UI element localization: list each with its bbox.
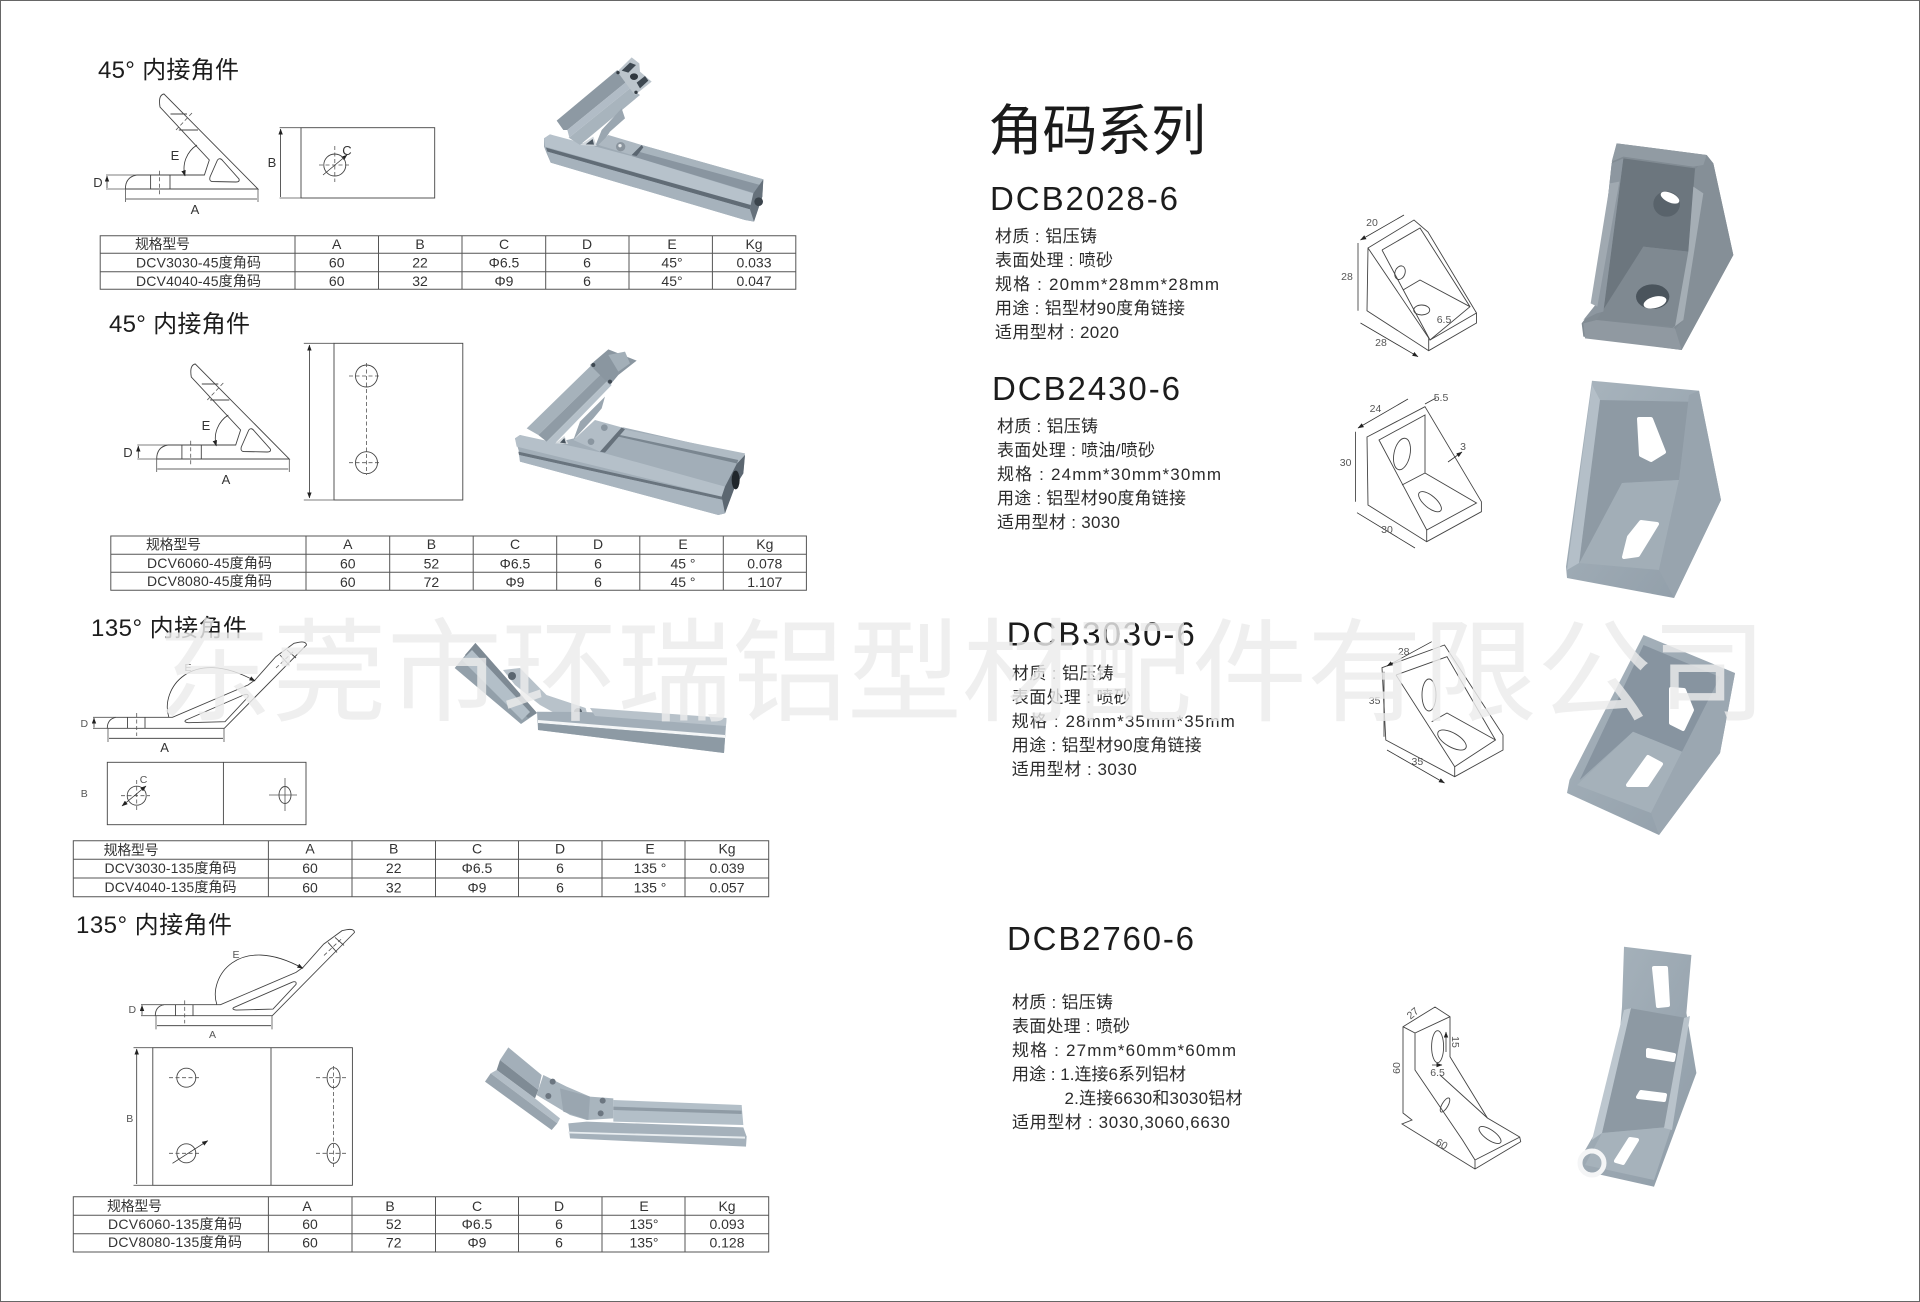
plate drawing with four holes [126,1048,352,1185]
specification list: 用途 : 铝型材90度角链接 [1012,736,1202,755]
table: 135 degree large sizes: D [554,1198,564,1214]
specification list: 规格 : 27mm*60mm*60mm [1012,1041,1236,1060]
table: 135 degree small sizes: C [472,840,482,856]
model name: DCB2760-6 [1007,920,1194,957]
table: 45 degree small sizes: 32 [412,273,428,289]
specification list: 规格 : 20mm*28mm*28mm [995,275,1219,294]
table: 135 degree small sizes: E [645,840,655,856]
table: 45 degree large sizes: B [427,536,436,552]
table: 45 degree large sizes: 60 [340,574,356,590]
table: 135 degree small sizes: 0.057 [709,880,745,896]
specification list: 适用型材 : 3030,3060,6630 [1012,1113,1230,1132]
panel: 45 degree corner small [93,57,796,289]
table: 135 degree large sizes: Φ6.5 [462,1216,493,1232]
table: 45 degree large sizes: 规格型号 [146,536,201,552]
table: 135 degree small sizes: 60 [302,880,318,896]
heading: 135 degree inner corner: 135° 内接角件 [76,912,232,939]
table: 135 degree large sizes: E [639,1198,649,1214]
table: 135 degree large sizes [73,1197,769,1252]
table: 135 degree large sizes: 72 [386,1234,402,1250]
table: 135 degree large sizes: 6 [555,1234,563,1250]
table: 45 degree large sizes: 60 [340,556,356,572]
table: 135 degree small sizes: 135 ° [634,860,666,876]
plate drawing with two holes [304,343,463,500]
table: 45 degree large sizes: Kg [756,536,773,552]
heading: 45 degree inner corner: 45° 内接角件 [109,311,250,338]
table: 45 degree small sizes: D [582,236,592,252]
side drawing with dimensions: A [209,1029,216,1041]
isometric drawing: 20 [1366,217,1378,229]
table: 135 degree small sizes: 6 [556,860,564,876]
side drawing with dimensions: D [81,718,89,730]
heading: 135 degree inner corner: 135° 内接角件 [91,615,247,642]
table: 45 degree small sizes: A [332,236,342,252]
side drawing with dimensions [129,929,354,1041]
table: 45 degree small sizes: E [667,236,677,252]
side drawing with dimensions: E [171,148,180,163]
table: 45 degree small sizes: Φ6.5 [489,254,520,270]
table: 45 degree large sizes: 45 ° [670,574,696,590]
table: 45 degree small sizes: 6 [583,273,591,289]
side drawing with dimensions: E [184,662,192,674]
table: 45 degree large sizes: 6 [594,574,602,590]
plate drawing with hole [268,128,435,198]
specification list: 规格 : 28mm*35mm*35mm [1012,712,1235,731]
specification list: 表面处理 : 喷砂 [1012,688,1131,707]
table: 135 degree large sizes: 0.128 [709,1234,745,1250]
plate drawing with hole and slot: B [81,788,88,800]
table: 135 degree large sizes: C [472,1198,482,1214]
photo: bracket [1582,143,1733,350]
table: 135 degree large sizes: DCV6060-135度角码 [108,1216,242,1232]
table: 135 degree small sizes: 规格型号 [104,842,159,858]
panel: DCB2028-6 [990,143,1733,357]
specification list: 用途 : 铝型材90度角链接 [997,489,1186,508]
specification list: 表面处理 : 喷砂 [995,251,1113,270]
table: 45 degree large sizes: Φ6.5 [500,556,531,572]
photo: 135 degree assembled profile [455,643,726,753]
isometric drawing: 27 [1405,1005,1422,1022]
table: 45 degree large sizes: A [343,536,353,552]
table: 45 degree small sizes: 规格型号 [135,236,190,252]
table: 45 degree large sizes: DCV6060-45度角码 [147,555,272,571]
photo: 45 degree assembled profile [544,57,763,222]
photo: bracket [1567,635,1735,835]
isometric drawing: 35 [1369,695,1381,707]
specification list [1012,664,1235,779]
side drawing with dimensions: D [123,445,133,460]
table: 135 degree small sizes [73,840,769,897]
table: 45 degree large sizes: DCV8080-45度角码 [147,573,272,589]
table: 135 degree large sizes: DCV8080-135度角码 [108,1234,242,1250]
isometric drawing [1391,1005,1521,1169]
table: 135 degree small sizes: DCV3030-135度角码 [104,860,236,876]
isometric drawing: 28 [1375,337,1387,349]
model name: DCB2430-6 [992,370,1180,407]
table: 45 degree small sizes: 6 [583,254,591,270]
side drawing with dimensions: E [202,418,211,433]
table: 135 degree small sizes: DCV4040-135度角码 [104,879,236,895]
side drawing with dimensions: D [129,1004,137,1016]
panel: DCB3030-6 [1007,616,1735,835]
table: 45 degree large sizes: 52 [424,556,439,572]
isometric drawing: 30 [1381,524,1393,536]
panel: DCB2430-6 [992,370,1721,598]
side drawing with dimensions [123,364,289,487]
table: 45 degree large sizes: 1.107 [747,574,783,590]
plate drawing with hole and slot [81,762,306,825]
specification list: 用途 : 铝型材90度角链接 [995,299,1185,318]
heading: 45 degree inner corner: 45° 内接角件 [98,57,239,84]
table: 135 degree small sizes: D [555,840,565,856]
table: 135 degree large sizes: 6 [555,1216,563,1232]
table: 45 degree large sizes: E [678,536,688,552]
side drawing with dimensions: E [232,949,240,961]
table: 135 degree large sizes: 135° [630,1234,658,1250]
table: 135 degree large sizes: Kg [718,1198,736,1214]
specification list: 适用型材 : 2020 [995,323,1119,342]
isometric drawing [1369,642,1503,783]
panel: 135 degree corner small [73,615,769,897]
table: 45 degree large sizes: 45 ° [670,556,696,572]
photo: bracket [1579,947,1696,1187]
table: 135 degree large sizes: 60 [302,1216,318,1232]
isometric drawing: 15 [1449,1036,1461,1048]
side drawing with dimensions: D [93,175,103,190]
isometric drawing: 3 [1460,441,1466,453]
table: 135 degree large sizes: Φ9 [468,1234,487,1250]
table: 45 degree small sizes: DCV4040-45度角码 [136,273,261,289]
specification list [997,417,1221,532]
specification list: 材质 : 铝压铸 [995,227,1097,246]
specification list: 表面处理 : 喷砂 [1012,1017,1130,1036]
table: 45 degree small sizes: 0.047 [736,273,772,289]
table: 45 degree small sizes: 45° [661,254,683,270]
table: 135 degree small sizes: 32 [386,880,402,896]
side drawing with dimensions: A [160,740,169,755]
table: 135 degree small sizes: Φ9 [468,880,487,896]
isometric drawing: 60 [1433,1136,1450,1153]
table: 45 degree small sizes: 60 [329,254,345,270]
specification list: 规格 : 24mm*30mm*30mm [997,465,1221,484]
specification list: 2.连接6630和3030铝材 [1064,1089,1242,1108]
photo: 135 degree assembled wide profile [485,1047,747,1147]
main title: corner bracket series: 角码系列 [988,100,1206,162]
table: 45 degree large sizes: 0.078 [747,556,783,572]
watermark: company name: 东莞市环瑞铝型材配件有限公司 [157,611,1767,736]
table: 135 degree small sizes: A [305,840,315,856]
panel: 135 degree corner large [73,912,769,1252]
table: 45 degree large sizes: C [510,536,520,552]
model name: DCB3030-6 [1007,616,1195,653]
side drawing with dimensions: A [191,202,200,217]
plate drawing with hole and slot: C [140,774,148,786]
specification list: 适用型材 : 3030 [1012,760,1137,779]
table: 45 degree small sizes: 22 [412,254,428,270]
table: 135 degree large sizes: B [385,1198,395,1214]
isometric drawing: 6.5 [1430,1067,1445,1079]
specification list: 适用型材 : 3030 [997,513,1120,532]
side drawing with dimensions [81,642,306,755]
table: 45 degree large sizes: 6 [594,556,602,572]
table: 45 degree large sizes [111,536,806,590]
isometric drawing: 6.5 [1437,314,1451,326]
table: 135 degree large sizes: 60 [302,1234,318,1250]
table: 135 degree small sizes: Φ6.5 [462,860,493,876]
model name: DCB2028-6 [990,180,1178,217]
table: 135 degree small sizes: 6 [556,880,564,896]
table: 135 degree large sizes: 0.093 [709,1216,745,1232]
plate drawing with hole: B [268,155,276,170]
isometric drawing: 5.5 [1434,392,1448,404]
table: 135 degree large sizes: 规格型号 [107,1198,162,1214]
isometric drawing [1341,215,1476,357]
isometric drawing: 24 [1370,403,1381,415]
side drawing with dimensions: A [222,472,231,487]
table: 135 degree large sizes: 52 [386,1216,402,1232]
table: 45 degree small sizes: Φ9 [495,273,514,289]
isometric drawing: 28 [1398,646,1410,658]
specification list: 用途 : 1.连接6系列铝材 [1012,1065,1186,1084]
table: 45 degree large sizes: 72 [424,574,439,590]
table: 45 degree small sizes: 45° [661,273,683,289]
table: 135 degree small sizes: 0.039 [709,860,745,876]
isometric drawing [1340,392,1481,548]
table: 135 degree small sizes: 135 ° [634,880,666,896]
table: 45 degree small sizes: DCV3030-45度角码 [136,254,261,270]
isometric drawing: 30 [1340,457,1352,469]
table: 45 degree small sizes [100,236,796,289]
specification list [995,227,1219,342]
specification list: 材质 : 铝压铸 [1012,664,1114,683]
table: 45 degree large sizes: D [593,536,603,552]
photo: 45 degree assembled wide profile [515,349,745,515]
table: 135 degree large sizes: 135° [630,1216,658,1232]
side drawing with dimensions [93,94,258,217]
isometric drawing: 60 [1391,1062,1403,1074]
table: 45 degree small sizes: 0.033 [736,254,772,270]
table: 45 degree small sizes: B [415,236,425,252]
isometric drawing: 35 [1412,756,1423,768]
plate drawing with hole: C [342,143,352,158]
table: 45 degree small sizes: Kg [745,236,763,252]
table: 135 degree small sizes: 60 [302,860,318,876]
panel: DCB2760-6 [1007,920,1696,1187]
table: 45 degree small sizes: 60 [329,273,345,289]
photo: bracket [1566,381,1721,598]
specification list: 材质 : 铝压铸 [1012,993,1113,1012]
specification list: 材质 : 铝压铸 [997,417,1098,436]
table: 135 degree small sizes: Kg [718,840,736,856]
panel: 45 degree corner large [109,311,806,590]
table: 135 degree small sizes: 22 [386,860,402,876]
table: 135 degree small sizes: B [389,840,398,856]
table: 135 degree large sizes: A [302,1198,312,1214]
table: 45 degree large sizes: Φ9 [506,574,525,590]
isometric drawing: 28 [1341,271,1353,283]
specification list: 表面处理 : 喷油/喷砂 [997,441,1155,460]
specification list [1012,993,1242,1132]
table: 45 degree small sizes: C [499,236,509,252]
plate drawing with four holes: B [126,1113,133,1125]
